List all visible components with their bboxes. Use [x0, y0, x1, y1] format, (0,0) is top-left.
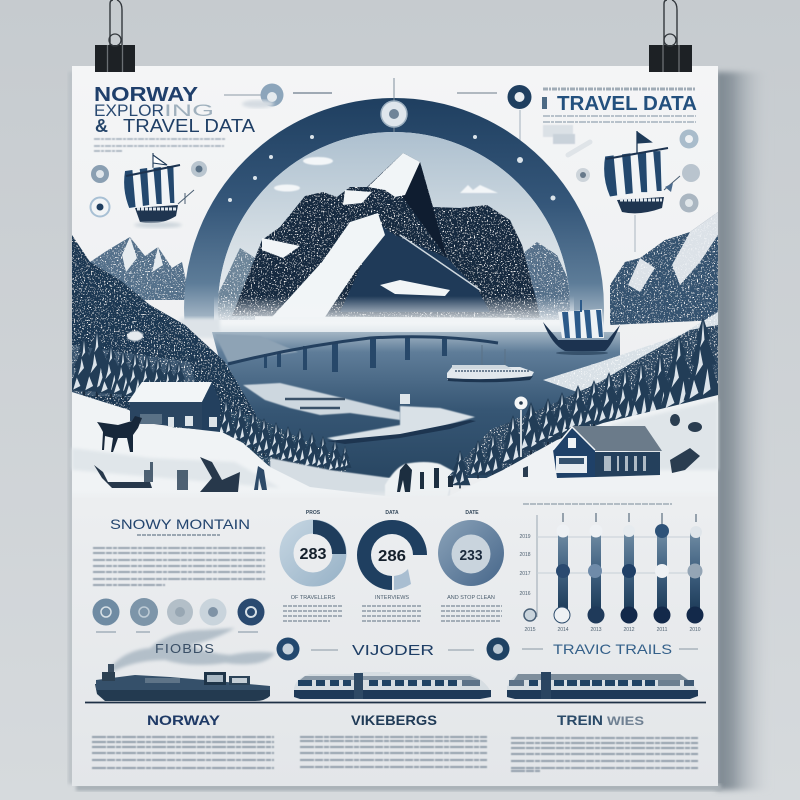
bar chart axis labels	[519, 534, 701, 633]
side peak right	[515, 242, 570, 320]
right slope figures	[670, 414, 702, 473]
sled right	[200, 457, 240, 492]
white blob on hillside	[127, 331, 143, 341]
top callout icon right	[457, 85, 532, 235]
centre figures	[397, 463, 453, 492]
forest left	[68, 330, 200, 400]
paper poster	[72, 66, 718, 786]
far shore	[215, 334, 298, 362]
signpost	[514, 396, 528, 457]
right ship icons	[576, 130, 700, 212]
poster shadow	[68, 72, 771, 791]
sled figures	[144, 462, 188, 490]
mountain central face	[340, 225, 490, 312]
sky inside arch	[218, 132, 570, 320]
forest slope left of fjord	[216, 400, 352, 474]
donut chart 1	[283, 510, 346, 621]
vikebergs heading: VIKEBERGS	[351, 712, 437, 728]
donut chart 3: AND STOP CLEAN	[447, 595, 495, 601]
snow valley	[270, 458, 450, 496]
donut chart 2: INTERVIEWS	[375, 595, 409, 601]
bar chart middle markers	[556, 564, 702, 578]
background mountains left	[72, 237, 190, 300]
horse	[97, 416, 142, 452]
donut chart 3	[438, 510, 504, 621]
title block: TRAVEL DATA	[123, 116, 255, 136]
trein wies heading	[557, 712, 644, 728]
snow slope right	[447, 395, 718, 497]
vijoder heading: VIJODER	[352, 642, 434, 659]
bar chart axis labels: 2014	[557, 627, 569, 633]
background mountains right	[610, 212, 718, 325]
top callout icon left	[224, 84, 332, 108]
arch snowflakes	[228, 135, 556, 202]
bar chart axis labels: 2018	[519, 552, 531, 558]
left viking ship	[123, 153, 194, 228]
circle icon 1	[276, 638, 300, 660]
title block: EXPLOR	[94, 101, 164, 120]
snowy mountain heading: SNOWY MONTAIN	[110, 516, 250, 532]
sled left	[94, 465, 152, 488]
mist at mountain foot	[214, 296, 574, 335]
house right	[553, 426, 662, 478]
distant walker	[523, 466, 528, 477]
ferry	[447, 345, 534, 382]
donut chart 2	[357, 510, 427, 621]
house left	[128, 382, 220, 432]
clouds	[274, 157, 525, 193]
main mountain	[232, 153, 540, 318]
snowy far hill right	[543, 312, 718, 400]
travel data heading block	[542, 89, 697, 155]
mountain snow slopes	[262, 153, 450, 317]
bar chart axis labels: 2010	[689, 627, 701, 633]
bar chart top markers	[556, 524, 702, 538]
donut chart 1: PROS	[306, 510, 321, 516]
bar chart axis labels: 2017	[519, 571, 531, 577]
cargo ship	[95, 664, 270, 701]
text block: trein wies	[511, 738, 698, 771]
text block: vikebergs	[300, 737, 487, 767]
left ship icons	[90, 161, 207, 216]
side peak left	[215, 248, 255, 320]
train 1	[294, 672, 491, 699]
track line	[85, 702, 706, 704]
bridge	[228, 337, 498, 372]
trein wies heading: TREIN	[557, 712, 603, 728]
bar chart axis labels: 2019	[519, 534, 531, 540]
snow shading right	[610, 400, 718, 470]
bar chart axis labels: 2012	[623, 627, 635, 633]
donut chart 3: DATE	[465, 510, 479, 516]
bar chart axis labels: 2016	[519, 591, 531, 597]
bar chart axis labels: 2011	[657, 627, 668, 633]
title block: NORWAY	[94, 84, 199, 106]
bar chart bottom markers	[524, 606, 704, 624]
walker figure	[254, 466, 267, 490]
travic trails heading: TRAVIC TRAILS	[553, 641, 672, 657]
snow slope left	[72, 392, 400, 498]
dark hillside left	[72, 235, 262, 440]
train 2	[507, 672, 698, 699]
circular arch	[184, 98, 604, 326]
right longship on water	[543, 300, 620, 355]
text block: snowy mountain	[93, 548, 265, 585]
fiords heading: FIOBDS	[155, 641, 215, 656]
trein wies heading: WIES	[607, 714, 644, 728]
bar chart axis labels: 2015	[524, 627, 536, 633]
snowy islands	[243, 383, 476, 444]
subheading line	[137, 534, 220, 536]
text block: norway	[92, 737, 274, 768]
right viking ship	[603, 131, 680, 252]
donut chart 2: DATA	[385, 510, 399, 516]
norway heading: NORWAY	[147, 712, 221, 728]
title block: ING	[164, 101, 214, 120]
title caption text lines	[94, 139, 226, 151]
icon row	[92, 598, 264, 632]
fjord water	[212, 332, 620, 478]
donut chart 2: 286	[378, 548, 406, 565]
donut chart 1: 283	[300, 546, 327, 563]
forest right	[447, 317, 722, 488]
snow bump centre	[385, 462, 455, 497]
hanging clip left	[95, 0, 135, 72]
circle icon 2	[486, 638, 510, 660]
title block	[94, 84, 255, 136]
arch end fade	[180, 318, 220, 338]
mountain dark face	[402, 162, 447, 258]
smoke from ship	[110, 628, 275, 672]
title block: &	[95, 116, 108, 136]
arch top medallion	[381, 78, 407, 132]
bar chart axis labels: 2013	[590, 627, 602, 633]
donut chart 1: OF TRAVELLERS	[291, 595, 336, 601]
bar chart	[519, 504, 704, 633]
hanging clip right	[649, 0, 692, 72]
foreground snow fade	[72, 490, 718, 500]
travel data heading block: TRAVEL DATA	[557, 93, 697, 115]
donut chart 3: 233	[460, 547, 482, 564]
snow shading band	[72, 448, 280, 488]
